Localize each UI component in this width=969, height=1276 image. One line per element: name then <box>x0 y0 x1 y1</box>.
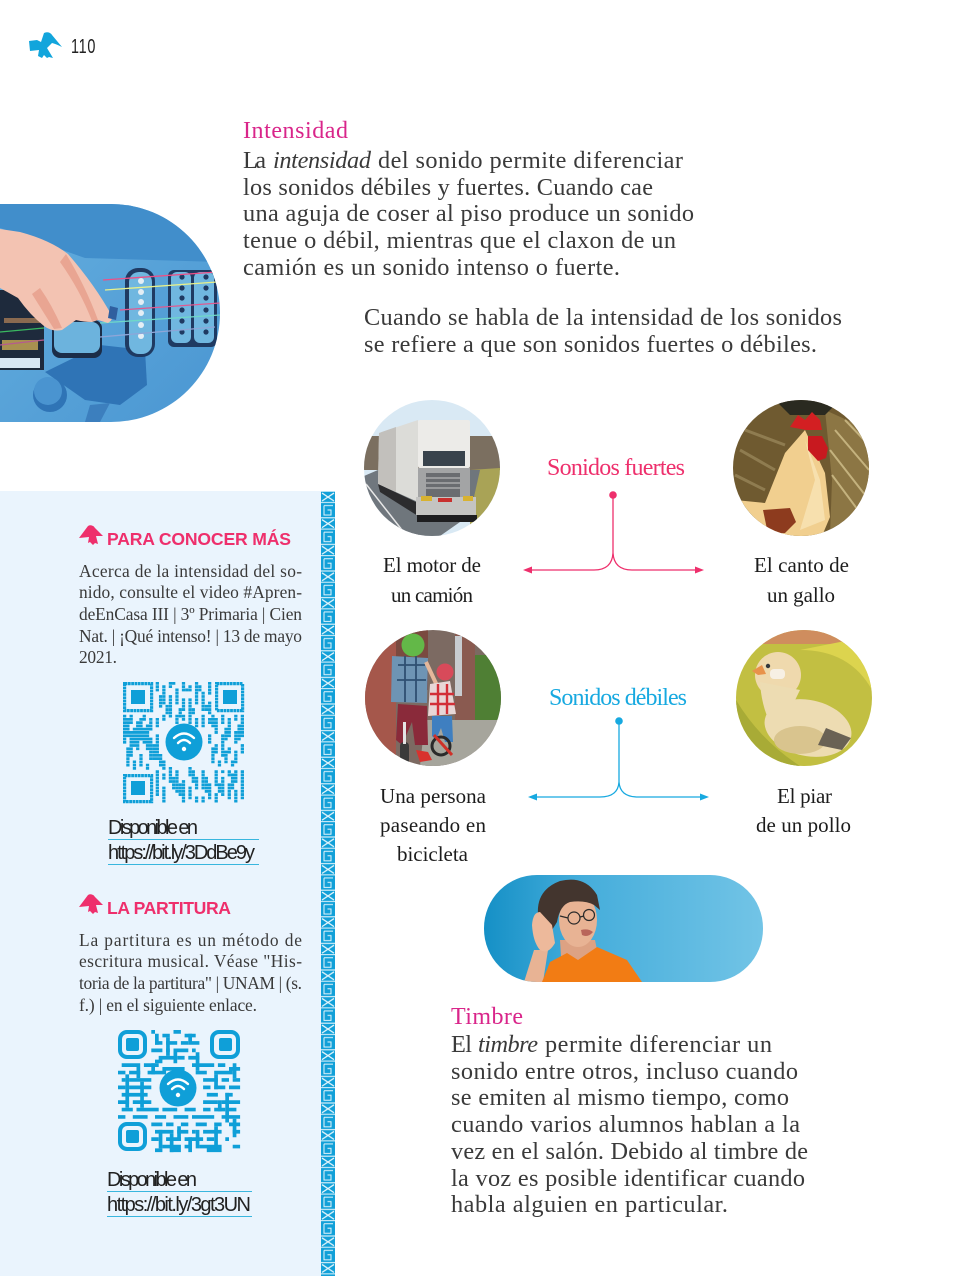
text block: para conocer más <box>79 561 302 667</box>
page number: 110 <box>71 35 96 58</box>
availability link 1 <box>108 817 259 864</box>
caption: truck: El motor de <box>383 553 481 577</box>
caption: truck: un camión <box>391 583 474 607</box>
caption: truck <box>383 553 481 607</box>
text block: intensidad: una aguja de coser al piso produce un sonido <box>243 200 694 227</box>
arrow: blue fork <box>528 717 709 800</box>
icon: blue bird glyph <box>29 32 62 58</box>
text block: intensidad: los sonidos débiles y fuertes. Cuando cae <box>243 174 653 201</box>
availability link 1: Disponible en <box>108 817 198 839</box>
text block: intensidad: camión es un sonido intenso o fuerte. <box>243 254 620 281</box>
icon: wifi <box>160 1070 196 1106</box>
label: Sonidos fuertes: Sonidos fuertes <box>547 455 685 481</box>
availability link 2: https://bit.ly/3gt3UN <box>107 1194 251 1216</box>
text block: timbre <box>451 1031 808 1218</box>
caption: rooster: El canto de <box>754 553 849 577</box>
text block: la partitura: f.) | en el siguiente enlace. <box>79 995 257 1015</box>
text block: timbre: habla alguien en particular. <box>451 1191 728 1218</box>
caption: chick: El piar <box>777 784 832 808</box>
text block: timbre: sonido entre otros, incluso cuando <box>451 1058 798 1085</box>
text block: timbre: timbre <box>478 1031 538 1058</box>
text block: definition <box>364 304 842 358</box>
text block: timbre: permite diferenciar un <box>545 1031 772 1058</box>
text block: la partitura: escritura musical. Véase "His- <box>79 951 302 971</box>
text block: la partitura <box>79 930 302 1015</box>
panel: sidebar <box>0 491 335 1276</box>
caption: bicycle: Una persona <box>380 784 487 808</box>
text block: para conocer más: Nat. | ¡Qué intenso! | 13 de mayo <box>79 626 302 646</box>
text block: intensidad: del sonido permite diferenciar <box>378 147 683 174</box>
caption: chick: de un pollo <box>756 813 851 837</box>
QR code 2 <box>118 1032 240 1152</box>
availability link 2: Disponible en <box>107 1169 197 1191</box>
greek key border <box>321 491 335 1276</box>
text block: timbre: El <box>451 1031 472 1058</box>
text block: para conocer más: 2021. <box>79 647 117 667</box>
caption: chick <box>756 784 851 837</box>
text block: intensidad: intensidad <box>273 147 372 174</box>
photo: children on bicycles <box>364 630 502 766</box>
text block: timbre: vez en el salón. Debido al timbre de <box>451 1138 808 1165</box>
caption: rooster <box>754 553 849 607</box>
text block: definition: Cuando se habla de la intensidad de los sonidos <box>364 304 842 331</box>
icon: pink bird glyph <box>79 525 103 545</box>
availability link 1: https://bit.ly/3DdBe9y <box>108 842 255 864</box>
text block: intensidad: tenue o débil, mientras que el claxon de un <box>243 227 676 254</box>
caption: bicycle <box>380 784 487 866</box>
photo: man listening <box>484 875 763 982</box>
photo: truck <box>364 400 500 536</box>
text block: intensidad: La <box>243 147 266 174</box>
text block: la partitura: La partitura es un método de <box>79 930 302 950</box>
text block: timbre: se emiten al mismo tiempo, como <box>451 1084 789 1111</box>
arrow: pink fork <box>523 491 704 574</box>
caption: bicycle: bicicleta <box>397 842 469 866</box>
photo: hand plucking electric guitar <box>0 204 220 422</box>
availability link 2 <box>107 1169 252 1216</box>
icon: wifi <box>166 724 202 760</box>
icon: pink bird glyph <box>79 894 103 914</box>
heading: La partitura: LA PARTITURA <box>107 898 231 918</box>
heading: Intensidad: Intensidad <box>243 118 348 144</box>
QR code 1 <box>125 682 243 803</box>
label: Sonidos débiles: Sonidos débiles <box>549 685 687 711</box>
caption: rooster: un gallo <box>767 583 835 607</box>
heading: Para conocer más: PARA CONOCER MÁS <box>107 528 291 549</box>
text block: para conocer más: nido, consulte el video #Apren- <box>79 582 302 602</box>
text block: la partitura: toria de la partitura" | UNAM | (s. <box>79 973 302 993</box>
heading: Timbre: Timbre <box>451 1004 523 1030</box>
text block: definition: se refiere a que son sonidos fuertes o débiles. <box>364 331 817 358</box>
text block: timbre: la voz es posible identificar cuando <box>451 1165 805 1192</box>
text block: intensidad <box>243 147 694 281</box>
text block: para conocer más: Acerca de la intensidad del so- <box>79 561 302 581</box>
caption: bicycle: paseando en <box>380 813 486 837</box>
photo: chick <box>736 630 872 766</box>
text block: timbre: cuando varios alumnos hablan a la <box>451 1111 800 1138</box>
page header <box>29 32 96 58</box>
text block: para conocer más: deEnCasa III | 3º Primaria | Cien <box>79 604 302 624</box>
photo: rooster <box>733 400 869 536</box>
